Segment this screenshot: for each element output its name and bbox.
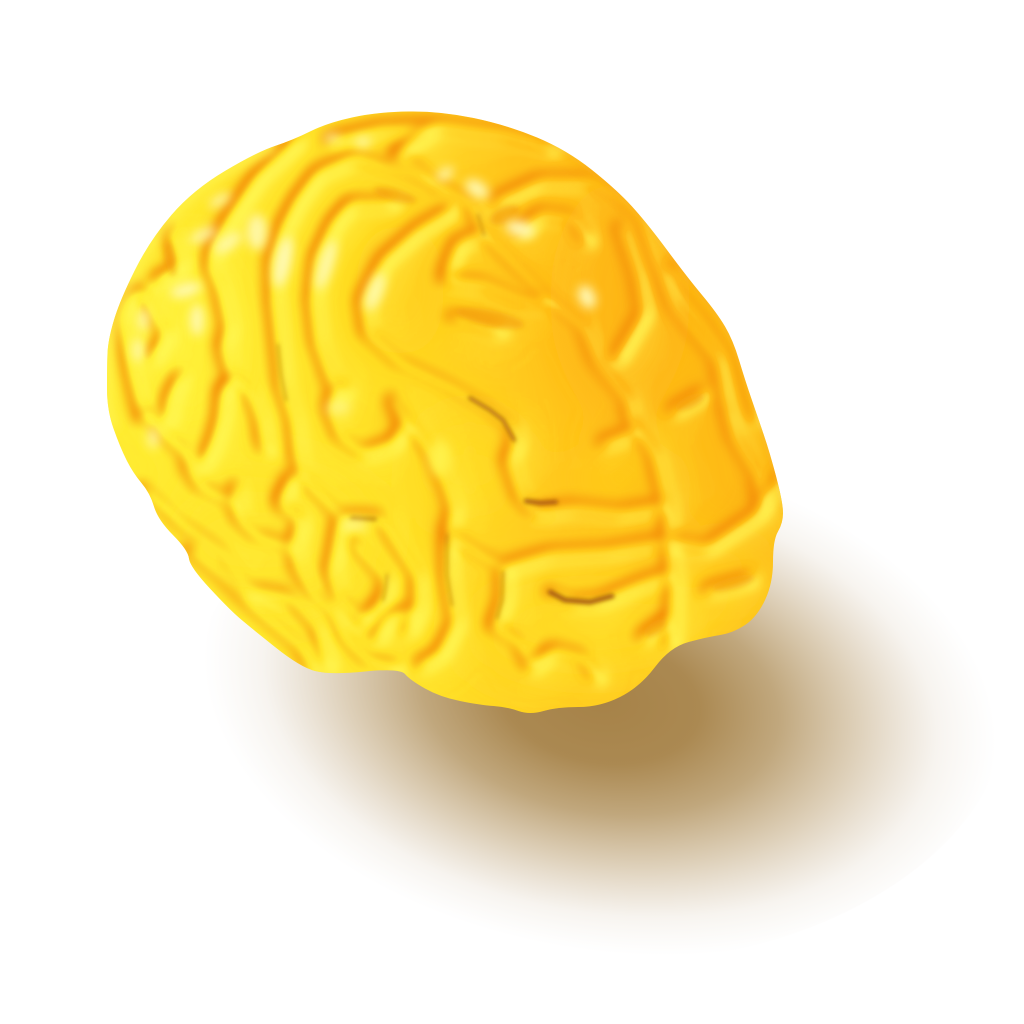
puffy folds lit from the upper left [110,112,783,694]
silhouette rim shading [107,137,783,513]
brain [107,112,783,713]
specular glints [132,133,599,530]
cast shadow [190,435,1010,965]
illustration: yellow 3D brain with cast shadow [107,112,964,934]
soft orange hollows [162,184,756,640]
deep dark creases [278,215,612,618]
broad tonal shading [130,180,770,685]
brain silhouette base colour [107,111,783,713]
surface shading, clipped to the brain [107,112,783,706]
